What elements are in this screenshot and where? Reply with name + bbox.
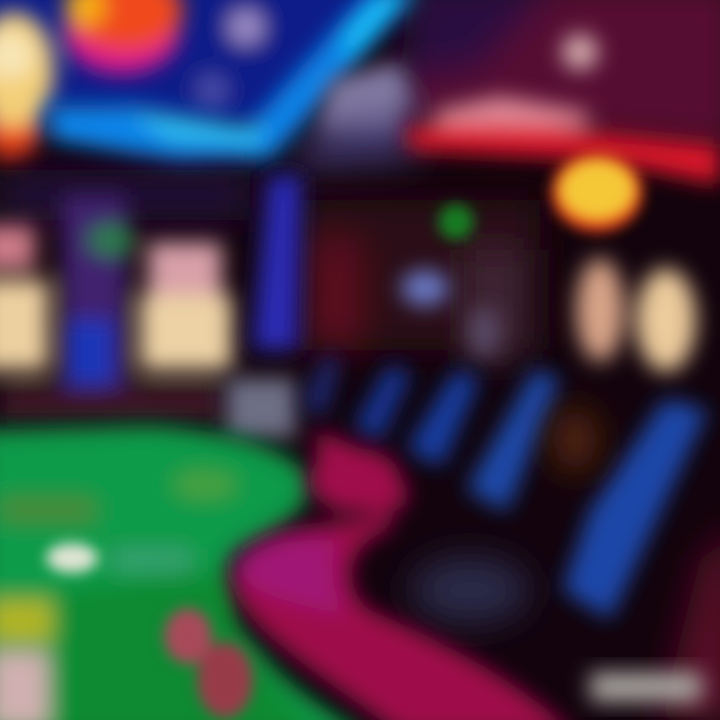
white card on table	[46, 543, 98, 573]
blue pillar	[252, 175, 302, 350]
grey stool	[226, 378, 296, 438]
ceiling: maroon right panel	[300, 0, 720, 170]
white floor sign	[590, 672, 702, 702]
red neon band	[405, 96, 720, 185]
green light	[438, 204, 474, 240]
blue chairs	[303, 355, 708, 620]
neon blue strip	[48, 0, 420, 165]
slot machines: left group	[0, 195, 232, 420]
right cream slot machines	[401, 258, 696, 372]
floor details	[410, 408, 720, 720]
yellow ball light	[551, 152, 643, 232]
ceiling: starry blue panel	[0, 0, 410, 140]
grey-white ceiling sign	[320, 34, 598, 135]
magenta curved table rail	[232, 430, 575, 720]
ceiling lights: orange globe and yellow ball	[0, 0, 183, 162]
back wall	[0, 170, 540, 360]
chips stack	[164, 608, 253, 718]
green gaming table	[0, 425, 370, 720]
